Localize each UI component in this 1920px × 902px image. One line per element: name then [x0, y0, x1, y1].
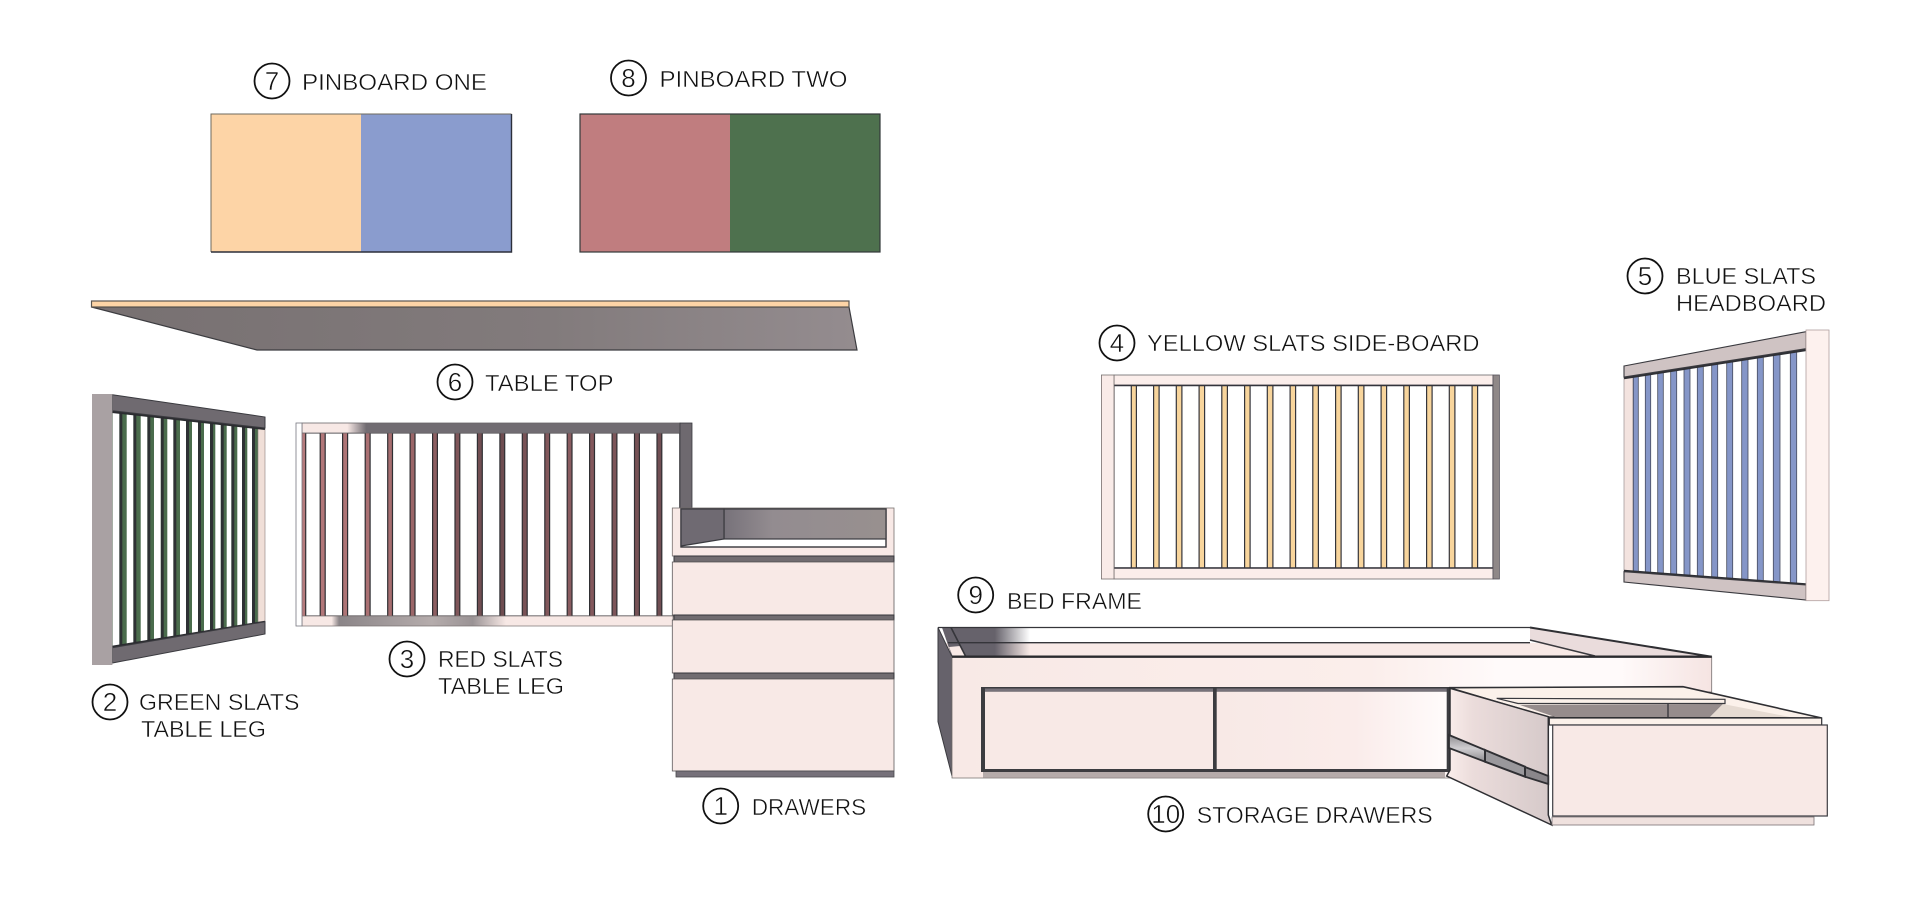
- panel: pinboard two: [580, 114, 880, 252]
- label: 1 drawers: [703, 788, 866, 824]
- label: 7 pinboard one: 7: [265, 66, 279, 96]
- label: 4 yellow slats side-board: YELLOW SLATS SIDE-BOARD: [1147, 330, 1480, 356]
- label: 6 table top: TABLE TOP: [485, 370, 614, 396]
- label: 4 yellow slats side-board: 4: [1110, 328, 1124, 358]
- label: 3 red slats table leg: 3: [400, 644, 414, 674]
- label: 10 storage drawers: [1148, 796, 1433, 832]
- label: 3 red slats table leg: RED SLATS: [438, 646, 563, 672]
- panel: yellow slats side-board: [1101, 375, 1499, 579]
- label: 9 bed frame: BED FRAME: [1007, 588, 1142, 614]
- label: 8 pinboard two: PINBOARD TWO: [660, 66, 848, 92]
- label: 1 drawers: 1: [713, 791, 728, 821]
- label: 7 pinboard one: PINBOARD ONE: [302, 69, 487, 95]
- panel: drawers: [672, 508, 894, 777]
- panel: storage drawers: [981, 687, 1827, 825]
- label: 8 pinboard two: 8: [621, 63, 636, 93]
- panel: blue slats headboard: [1624, 330, 1829, 601]
- label: 6 table top: 6: [448, 367, 462, 397]
- panel: table top: [92, 301, 857, 350]
- panel: bed frame: [938, 628, 1712, 778]
- label: 2 green slats table leg: TABLE LEG: [141, 716, 266, 742]
- panel: pinboard one: [211, 114, 512, 252]
- label: 10 storage drawers: STORAGE DRAWERS: [1197, 802, 1433, 828]
- label: 6 table top: [438, 364, 614, 400]
- label: 2 green slats table leg: [92, 684, 300, 742]
- label: 10 storage drawers: 10: [1151, 799, 1180, 829]
- label: 5 blue slats headboard: [1628, 258, 1826, 316]
- label: 1 drawers: DRAWERS: [752, 794, 866, 820]
- label: 5 blue slats headboard: BLUE SLATS: [1676, 263, 1816, 289]
- label: 3 red slats table leg: TABLE LEG: [438, 673, 564, 699]
- label: 3 red slats table leg: [390, 642, 564, 699]
- label: 2 green slats table leg: 2: [103, 687, 117, 717]
- label: 5 blue slats headboard: HEADBOARD: [1676, 290, 1826, 316]
- label: 9 bed frame: 9: [968, 580, 983, 610]
- label: 7 pinboard one: [254, 64, 487, 98]
- panel: green slats table leg: [92, 394, 265, 665]
- label: 2 green slats table leg: GREEN SLATS: [139, 689, 300, 715]
- label: 9 bed frame: [958, 578, 1142, 614]
- label: 5 blue slats headboard: 5: [1638, 261, 1652, 291]
- panel: red slats table leg: [296, 423, 692, 626]
- label: 4 yellow slats side-board: [1100, 326, 1480, 360]
- pulled-out drawer: [1447, 687, 1827, 825]
- label: 8 pinboard two: [611, 60, 848, 96]
